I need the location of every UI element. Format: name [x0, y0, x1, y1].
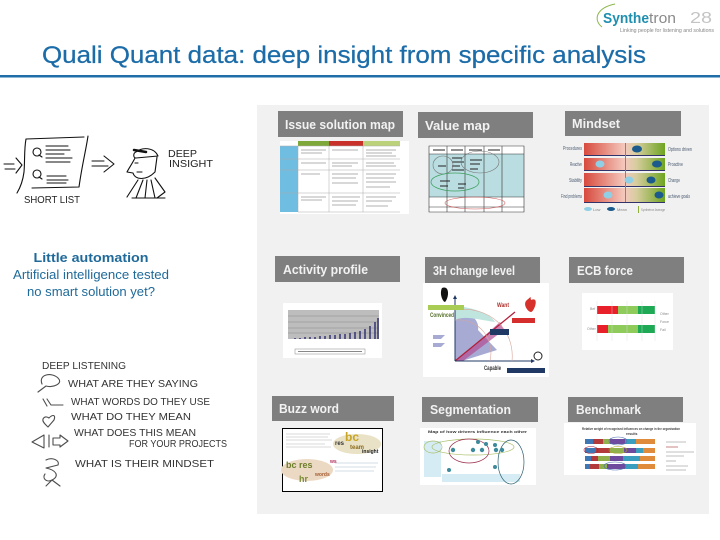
chart: mindset gradient bars: Mean: [617, 207, 627, 212]
sketch: short list to deep insight: [4, 136, 165, 198]
sketch: deep listening: WHAT DOES THIS MEAN: [74, 427, 196, 439]
sketch: deep listening: FOR YOUR PROJECTS: [129, 438, 227, 450]
title rule: [0, 75, 720, 78]
sketch: deep listening: WHAT DO THEY MEAN: [71, 411, 191, 423]
chart: benchmark stacked bars: results: [626, 432, 638, 436]
chart: mindset gradient bars: Procedures: [563, 146, 582, 152]
label: activity profile: Activity profile: [283, 263, 368, 277]
chart: ECB force stacked bars: Bef: [590, 307, 595, 311]
thumbnail: activity profile chart: [283, 303, 382, 358]
label: issue solution map: Issue solution map: [285, 118, 395, 132]
sketch: deep listening: [32, 360, 227, 486]
sketch: deep listening: WHAT IS THEIR MINDSET: [75, 458, 215, 470]
thumbnail: 3H change level diagram: Capable: [484, 366, 501, 372]
chart: mindset gradient bars: Options driven: [668, 147, 692, 153]
text block: little automation: Artificial intelligence tested: [13, 268, 169, 282]
thumbnail: buzz word clouds: bc res: [286, 460, 313, 470]
text block: little automation: Little automation: [34, 250, 149, 265]
chart: ECB force stacked bars: Fail: [660, 328, 666, 332]
label: 3H change level: 3H change level: [433, 264, 515, 278]
thumbnail: buzz word clouds: bc: [345, 430, 359, 444]
label: value map: [418, 112, 533, 138]
chart: mindset gradient bars: achieve goals: [668, 194, 690, 200]
chart: mindset gradient bars: Proactive: [668, 162, 683, 168]
chart: mindset gradient bars: Reactive: [570, 162, 582, 168]
chart: ECB force stacked bars: Force: [660, 320, 669, 324]
thumbnail: segmentation map: [420, 428, 536, 485]
thumbnail: issue solution table: [280, 141, 409, 214]
label: ECB force: [569, 257, 684, 283]
thumbnail: buzz word clouds: [281, 428, 382, 492]
thumbnail: buzz word clouds: insight: [362, 449, 379, 455]
sketch: deep listening: WHAT WORDS DO THEY USE: [71, 396, 210, 408]
label: benchmark: [568, 397, 683, 422]
chart: ECB force stacked bars: Other: [587, 327, 597, 331]
thumbnail: buzz word clouds: ws: [329, 459, 337, 465]
label: 3H change level: [425, 257, 540, 283]
sketch label: deep insight: DEEP: [168, 149, 197, 160]
label: mindset: [565, 111, 681, 136]
sketch label: deep insight: INSIGHT: [169, 159, 213, 170]
chart: mindset gradient bars: Low: [593, 207, 600, 212]
thumbnail: 3H change level diagram: [423, 283, 549, 377]
label: benchmark: Benchmark: [576, 403, 641, 417]
chart: ECB force stacked bars: [582, 293, 673, 350]
sketch: deep listening: DEEP LISTENING: [42, 360, 126, 372]
sketch: deep listening: WHAT ARE THEY SAYING: [68, 378, 198, 390]
chart: ECB force stacked bars: Other: [660, 312, 670, 316]
logo: Synthetron: Synthe: [603, 10, 649, 27]
chart: mindset gradient bars: Change: [668, 178, 680, 184]
label: segmentation: Segmentation: [430, 403, 511, 417]
thumbnail: 3H change level diagram: Convinced: [430, 313, 454, 319]
thumbnail: buzz word clouds: team: [350, 445, 364, 451]
label: activity profile: [275, 256, 400, 282]
text block: little automation: no smart solution yet?: [27, 285, 155, 299]
thumbnail: value map: [429, 146, 524, 212]
title: Quali Quant data: deep insight from specific analysis: [42, 42, 646, 69]
chart: mindset gradient bars: Synthetron Average: [641, 207, 666, 212]
thumbnail: 3H change level diagram: Want: [497, 303, 509, 309]
label: value map: Value map: [425, 119, 490, 133]
chart: mindset gradient bars: Stability: [569, 178, 582, 184]
thumbnail: buzz word clouds: words: [314, 472, 330, 478]
sketch label: deep insight: [168, 149, 213, 170]
chart: benchmark stacked bars: [564, 423, 696, 475]
logo: Synthetron: tron: [649, 10, 676, 27]
logo: Synthetron: Linking people for listening and solutions: [620, 28, 715, 34]
page number: 28: [690, 10, 712, 27]
label: buzz word: Buzz word: [279, 402, 339, 416]
thumbnail: buzz word clouds: hr: [299, 474, 308, 484]
label: segmentation: [422, 397, 538, 422]
label: mindset: Mindset: [572, 117, 621, 131]
chart: mindset gradient bars: [561, 143, 692, 213]
label: issue solution map: [278, 111, 403, 137]
label: buzz word: [272, 396, 394, 421]
panel: analysis tools: [257, 105, 709, 514]
sketch label: short list: SHORT LIST: [24, 195, 80, 206]
thumbnail: segmentation map: Map of how drivers influence each other: [428, 430, 528, 434]
chart: mindset gradient bars: Find problems: [561, 194, 582, 200]
text block: little automation: [13, 250, 169, 299]
thumbnail: buzz word clouds: res: [335, 441, 345, 447]
chart: benchmark stacked bars: Relative weight of recognised influences on change in the organisation: [582, 427, 680, 431]
label: ECB force: ECB force: [577, 264, 633, 278]
logo: Synthetron: [597, 4, 715, 34]
